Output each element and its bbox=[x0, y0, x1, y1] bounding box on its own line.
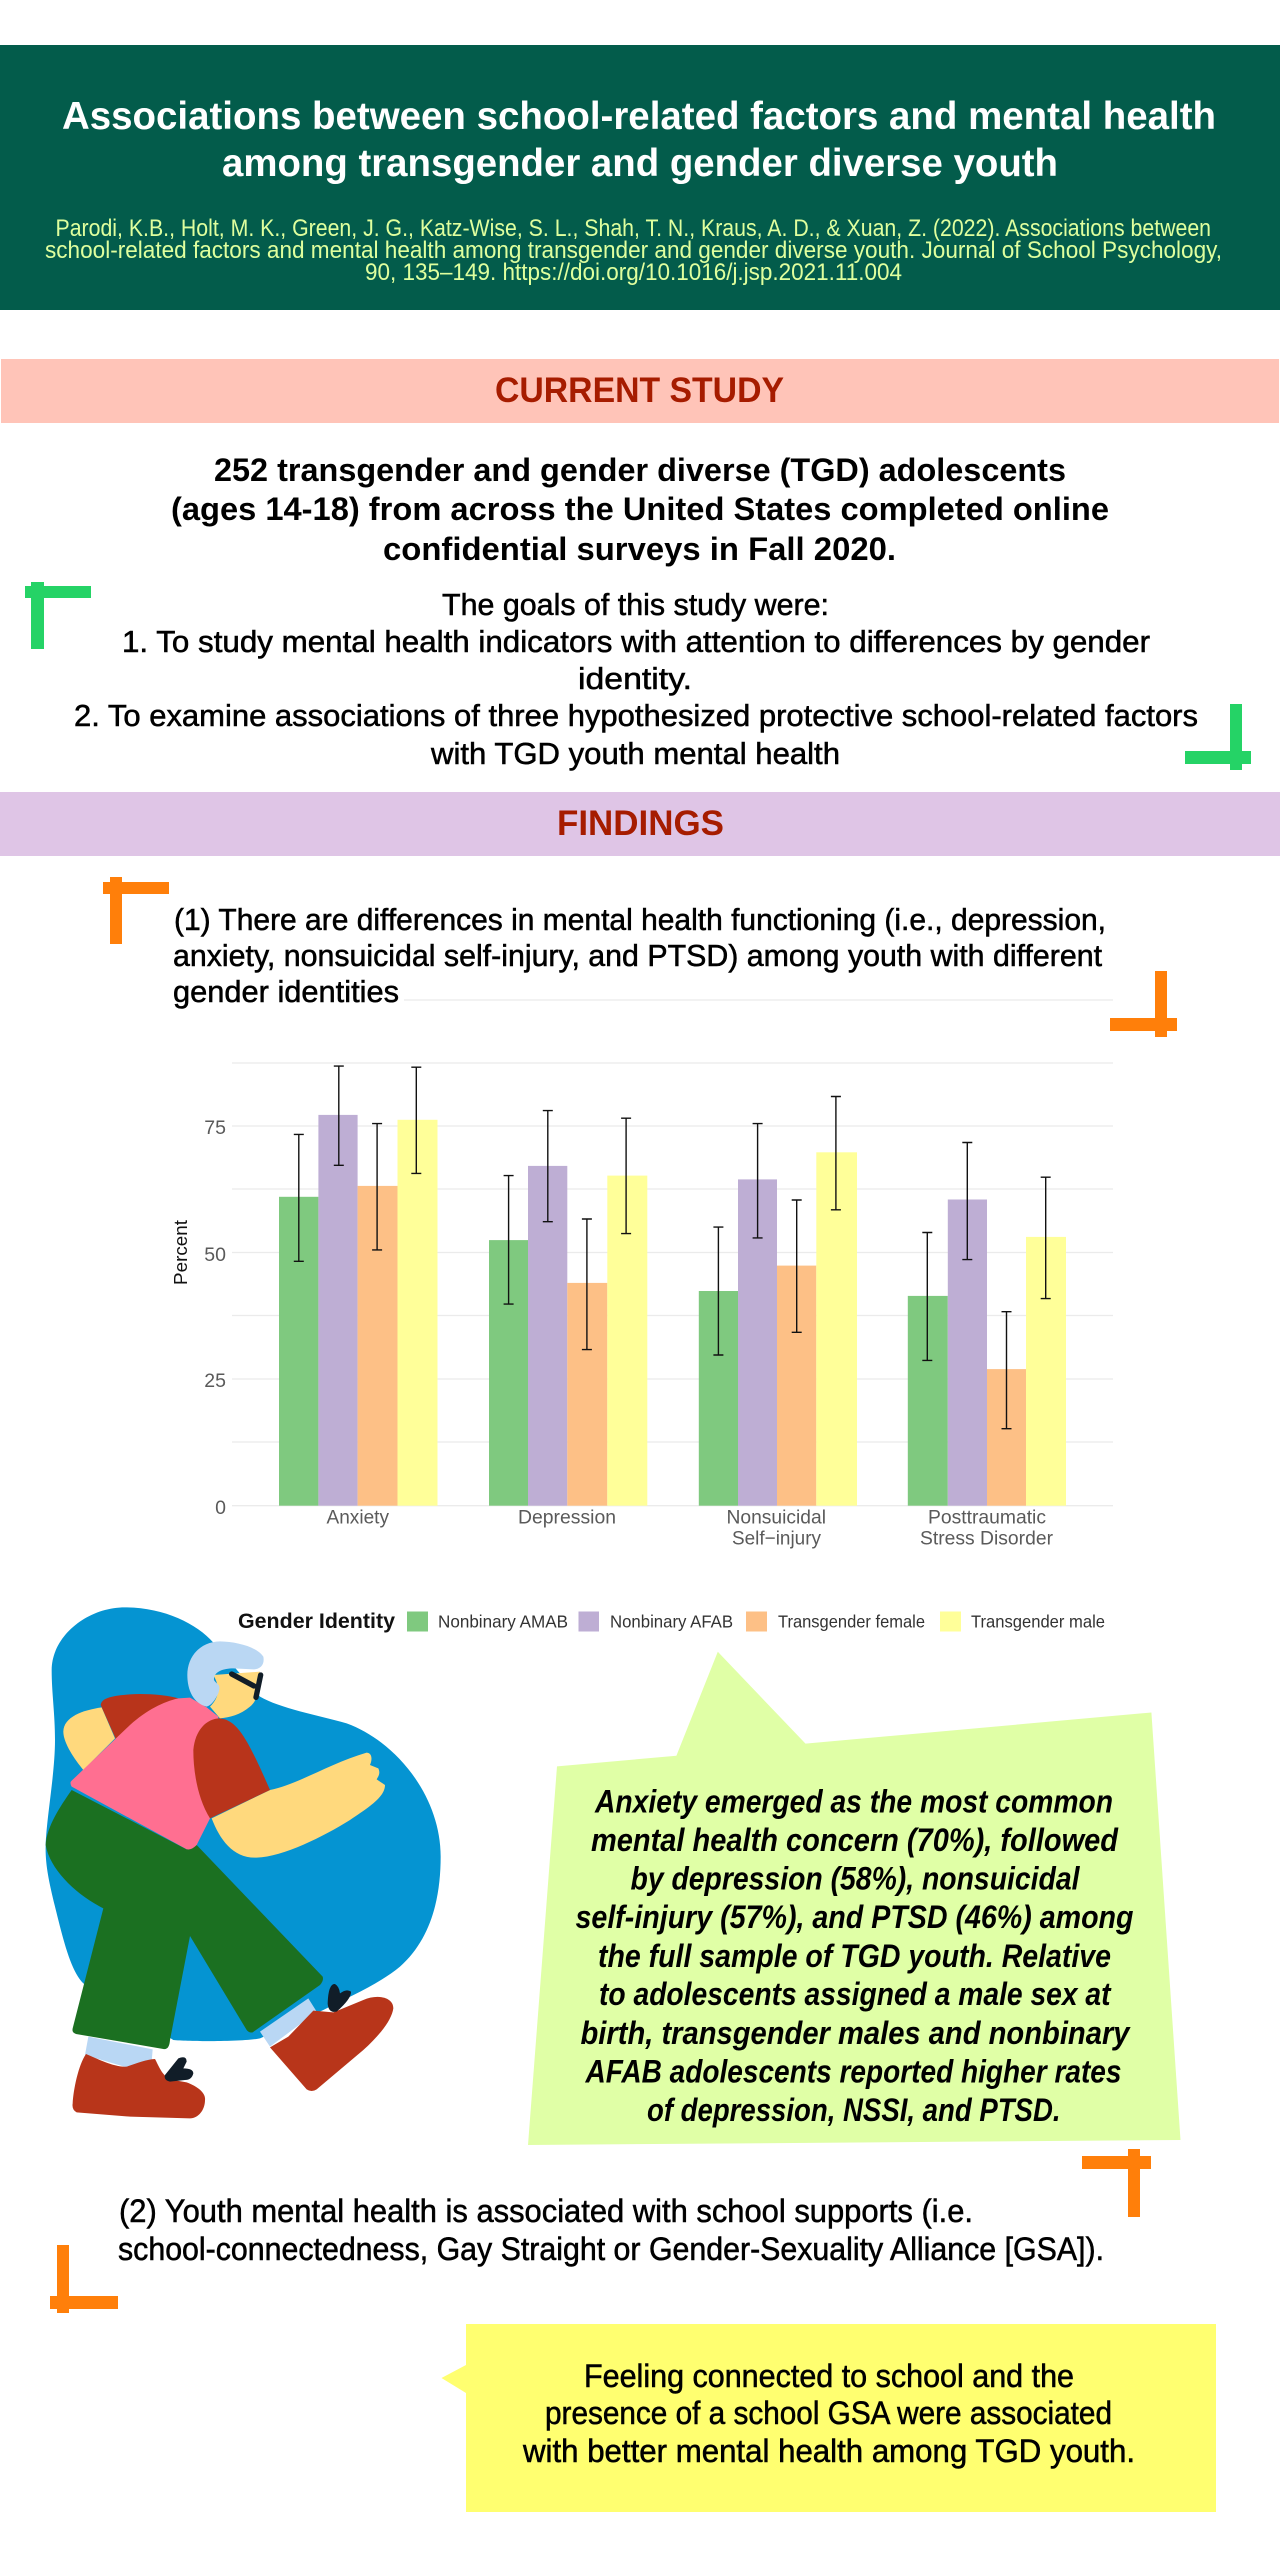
citation bbox=[45, 215, 1222, 286]
trousers bbox=[46, 1790, 323, 2049]
icon: orange corner bracket upper right bbox=[1082, 2149, 1151, 2217]
heading: current study: CURRENT STUDY bbox=[495, 371, 784, 410]
text block: study goals: 1. To study mental health indicators with attention to differences by gender bbox=[122, 624, 1150, 659]
legend: gender identity: Transgender male bbox=[971, 1612, 1105, 1632]
face bbox=[210, 1672, 260, 1718]
x axis labels: Posttraumatic bbox=[928, 1506, 1046, 1528]
callout text: to adolescents assigned a male sex at bbox=[599, 1976, 1112, 2012]
x axis labels bbox=[326, 1506, 1053, 1550]
panel: header banner bbox=[0, 45, 1280, 310]
x axis labels: Self−injury bbox=[732, 1528, 821, 1550]
y axis labels bbox=[204, 1117, 226, 1519]
text block: finding one: anxiety, nonsuicidal self-injury, and PTSD) among youth with different bbox=[173, 938, 1102, 973]
callout: school connectedness bbox=[442, 2324, 1216, 2512]
legend: gender identity: Nonbinary AFAB bbox=[610, 1612, 733, 1632]
socks bbox=[85, 1998, 317, 2067]
text block: study goals bbox=[74, 587, 1198, 771]
text block: study sample: 252 transgender and gender diverse (TGD) adolescents bbox=[214, 452, 1066, 488]
front shoe bbox=[270, 1997, 393, 2091]
front arm bbox=[212, 1753, 385, 1858]
x axis labels: Depression bbox=[518, 1506, 616, 1528]
callout text: Anxiety emerged as the most common bbox=[594, 1784, 1113, 1820]
torso bbox=[70, 1698, 218, 1849]
callout text bbox=[522, 2358, 1135, 2469]
text block: study goals: with TGD youth mental health bbox=[430, 736, 840, 771]
icon: orange corner bracket top left bbox=[103, 877, 169, 944]
callout text: the full sample of TGD youth. Relative bbox=[598, 1938, 1111, 1974]
error bars bbox=[294, 1066, 1051, 1429]
x axis labels: Stress Disorder bbox=[920, 1528, 1053, 1550]
text block: finding two: school-connectedness, Gay Straight or Gender-Sexuality Alliance [GSA]). bbox=[118, 2231, 1104, 2267]
text block: finding two: (2) Youth mental health is associated with school supports (i.e. bbox=[119, 2193, 973, 2229]
y axis labels: 75 bbox=[204, 1117, 226, 1139]
icon: orange corner bracket lower left bbox=[50, 2245, 118, 2313]
callout text bbox=[576, 1784, 1134, 2128]
text block: finding one: gender identities bbox=[173, 974, 399, 1009]
icon: orange corner bracket right bbox=[1110, 971, 1177, 1037]
callout text: birth, transgender males and nonbinary bbox=[580, 2015, 1132, 2051]
front sleeve bbox=[193, 1718, 270, 1818]
text block: study sample: confidential surveys in Fall 2020. bbox=[383, 531, 896, 567]
rear sleeve bbox=[101, 1694, 178, 1739]
legend: gender identity: Nonbinary AMAB bbox=[438, 1612, 568, 1632]
icon: green corner bracket bottom right bbox=[1185, 704, 1251, 770]
citation: 90, 135–149. https://doi.org/10.1016/j.jsp.2021.11.004 bbox=[365, 259, 902, 286]
text block: study sample: (ages 14-18) from across the United States completed online bbox=[171, 491, 1109, 527]
text block: study goals: 2. To examine associations of three hypothesized protective school-related factors bbox=[74, 698, 1198, 733]
text block: finding two bbox=[118, 2193, 1104, 2267]
back shoe bbox=[72, 2054, 205, 2118]
text block: study goals: The goals of this study were: bbox=[442, 587, 829, 622]
legend: gender identity: Gender Identity bbox=[238, 1610, 395, 1633]
legend: gender identity: Transgender female bbox=[778, 1612, 925, 1632]
text block: finding one bbox=[173, 902, 1106, 1009]
bars: nonsuicidal self-injury bbox=[699, 1152, 857, 1506]
text block: study sample bbox=[171, 452, 1109, 567]
y axis labels: 50 bbox=[204, 1244, 226, 1266]
callout text: mental health concern (70%), followed bbox=[591, 1822, 1119, 1858]
callout: anxiety speech bubble bbox=[528, 1652, 1180, 2145]
bar chart: percent by gender identity bbox=[171, 1000, 1113, 1550]
callout text: Feeling connected to school and the bbox=[584, 2358, 1074, 2394]
bars: depression bbox=[489, 1166, 647, 1506]
title: Associations between school-related factors and mental health bbox=[62, 95, 1216, 138]
blue blob background bbox=[46, 1607, 441, 2041]
callout text: of depression, NSSI, and PTSD. bbox=[647, 2092, 1060, 2128]
title: among transgender and gender diverse youth bbox=[222, 142, 1058, 185]
y axis labels: 25 bbox=[204, 1370, 226, 1392]
x axis labels: Anxiety bbox=[326, 1506, 389, 1528]
callout text: AFAB adolescents reported higher rates bbox=[585, 2054, 1122, 2090]
bars: posttraumatic stress disorder bbox=[908, 1200, 1066, 1506]
title bbox=[62, 95, 1216, 185]
heading: current study bbox=[1, 359, 1279, 423]
y axis labels: 0 bbox=[215, 1497, 226, 1519]
legend: gender identity bbox=[238, 1610, 1105, 1633]
callout text: with better mental health among TGD youth. bbox=[522, 2433, 1135, 2469]
hair bbox=[187, 1641, 264, 1707]
bars: anxiety bbox=[279, 1115, 438, 1506]
x axis labels: Nonsuicidal bbox=[726, 1506, 826, 1528]
icon: green corner bracket top left bbox=[25, 582, 91, 649]
callout text: self-injury (57%), and PTSD (46%) among bbox=[576, 1899, 1134, 1935]
citation: school-related factors and mental health among transgender and gender diverse youth. Journal of School Psychology, bbox=[45, 237, 1222, 264]
heading: findings bbox=[0, 792, 1280, 856]
heading: findings: FINDINGS bbox=[557, 804, 724, 843]
callout text: by depression (58%), nonsuicidal bbox=[630, 1860, 1080, 1896]
shoelaces bbox=[165, 1984, 351, 2082]
callout text: presence of a school GSA were associated bbox=[545, 2395, 1112, 2431]
illustration: walking person bbox=[46, 1607, 441, 2118]
rear arm bbox=[63, 1707, 115, 1770]
text block: study goals: identity. bbox=[578, 661, 692, 696]
y axis title: Percent bbox=[171, 1220, 191, 1285]
text block: finding one: (1) There are differences in mental health functioning (i.e., depression, bbox=[174, 902, 1106, 937]
glasses bbox=[232, 1674, 261, 1697]
